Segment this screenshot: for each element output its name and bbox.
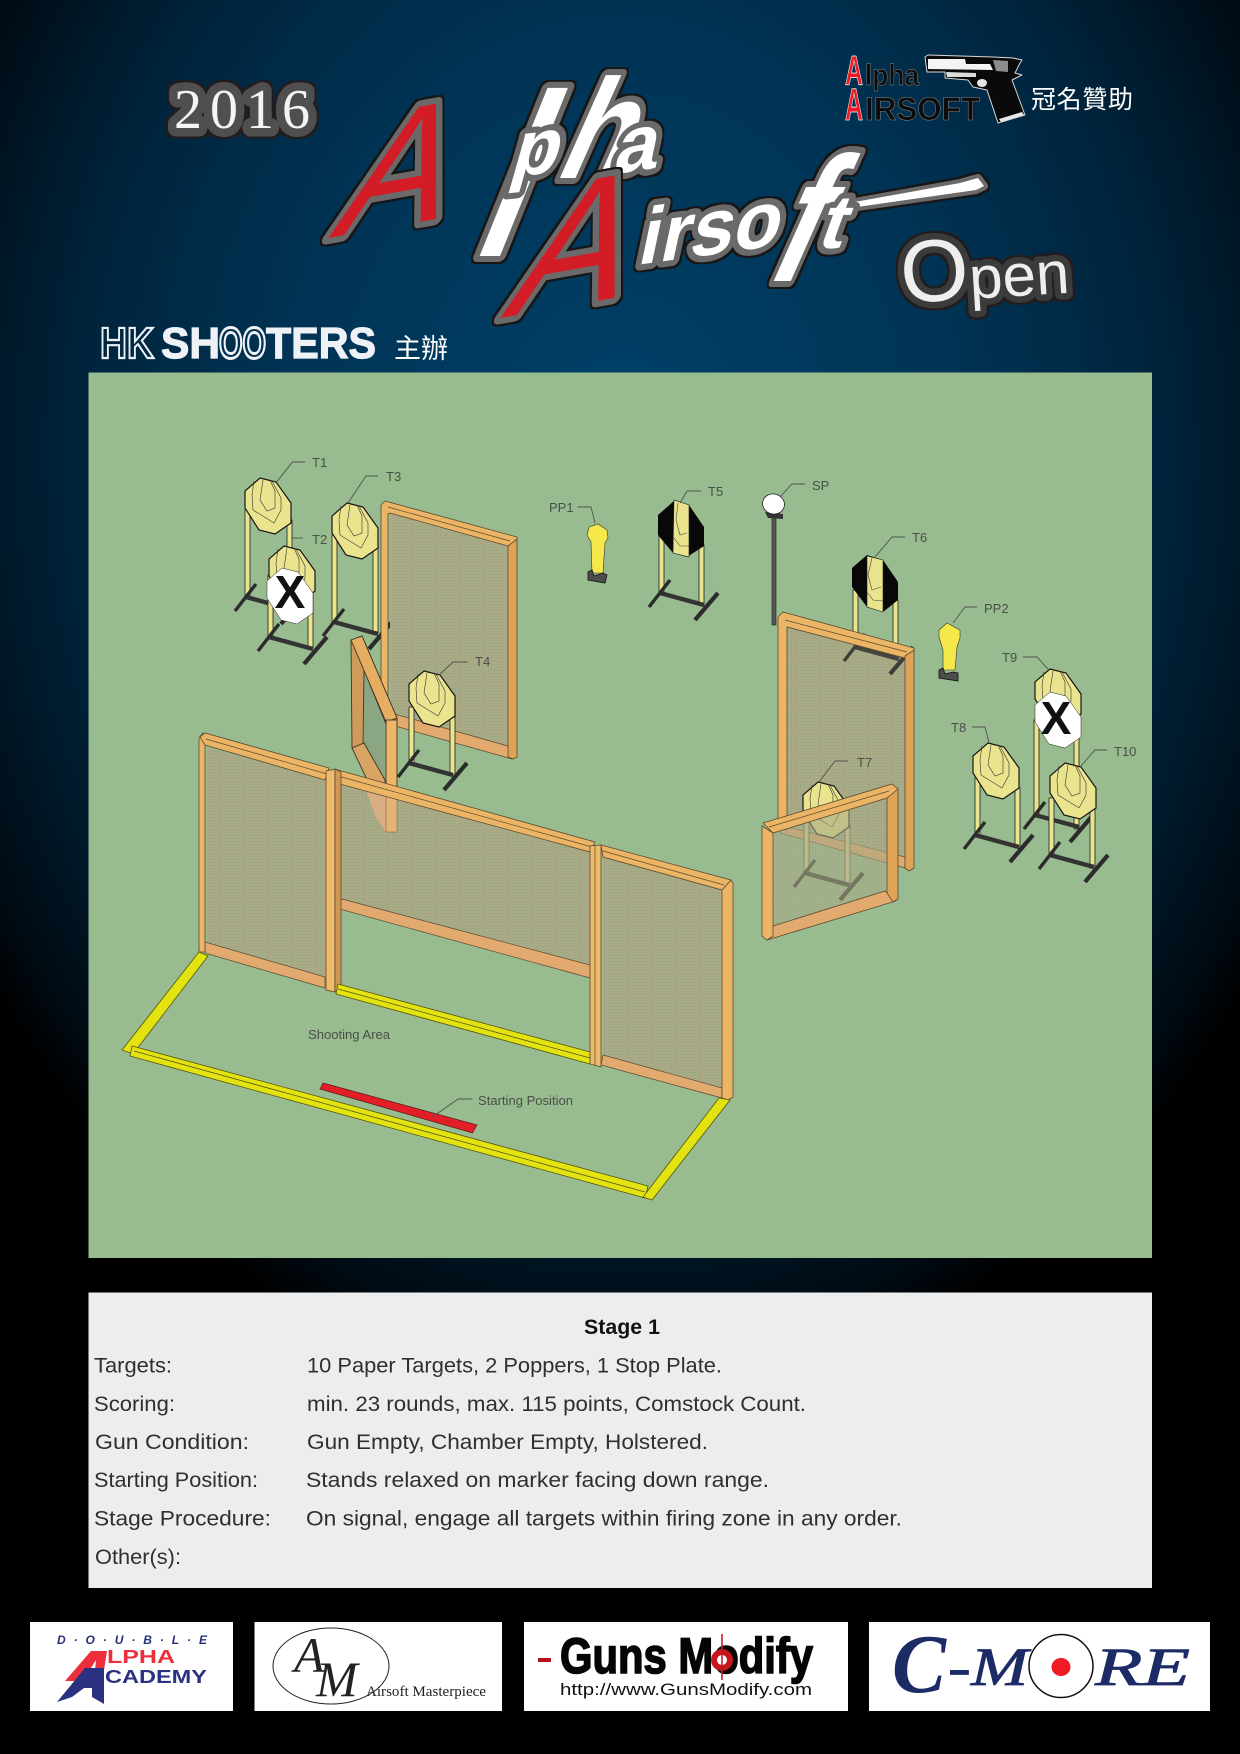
popper PP2 <box>939 623 960 681</box>
leader lines <box>276 462 1107 1117</box>
middle wall panel <box>336 783 590 978</box>
logo: C-MORE: RE <box>1094 1637 1190 1697</box>
row: stage procedure <box>94 1508 902 1530</box>
row: scoring <box>94 1393 806 1416</box>
word: Airsoft: t <box>809 179 865 264</box>
row: targets: 10 Paper Targets, 2 Poppers, 1 Stop Plate. <box>307 1354 722 1378</box>
target T9 with no-shoot <box>1024 669 1093 842</box>
logo: Guns Modify: http://www.GunsModify.com <box>560 1680 812 1699</box>
sponsor wordmark <box>845 47 980 130</box>
logo: Airsoft Masterpiece: Airsoft Masterpiece <box>366 1684 486 1700</box>
target labels <box>308 455 1136 1108</box>
right wall frame <box>778 612 914 871</box>
logo: Open: Open <box>897 213 1071 322</box>
logo: Double Alpha Academy: LPHA <box>107 1647 175 1667</box>
logo: Guns Modify <box>524 1622 848 1711</box>
target labels: T8 <box>951 720 966 735</box>
T6 stand base seen through mesh <box>844 634 913 674</box>
logo: HK Shooters: SH <box>161 319 220 368</box>
target T6 black partial <box>852 555 898 645</box>
row: scoring: min. 23 rounds, max. 115 points, Comstock Count. <box>307 1393 806 1416</box>
target labels: T10 <box>1114 744 1136 759</box>
target T5 black partial <box>649 500 718 620</box>
panel: stage diagram <box>88 372 1152 1258</box>
target labels: T6 <box>912 530 927 545</box>
target labels: Shooting Area <box>308 1027 391 1042</box>
sponsor wordmark: lpha <box>865 59 919 92</box>
target labels: T9 <box>1002 650 1017 665</box>
logo: Airsoft Masterpiece: M <box>315 1651 360 1707</box>
word: Alpha: l <box>444 47 600 306</box>
top rails <box>200 733 329 780</box>
shooting area boundary <box>122 952 730 1200</box>
heading: Stage 1: Stage 1 <box>584 1316 660 1339</box>
word: Airsoft <box>485 120 984 359</box>
starting position marker <box>320 1083 477 1133</box>
logo: C-MORE: -M <box>948 1637 1032 1697</box>
target T10 <box>1039 763 1108 882</box>
target labels: PP1 <box>549 500 574 515</box>
target T2 with no-shoot: X <box>275 566 306 618</box>
logo: Double Alpha Academy <box>30 1622 233 1711</box>
logo: HK Shooters: HK <box>100 319 154 368</box>
word: Alpha <box>314 47 679 306</box>
target labels: T5 <box>708 484 723 499</box>
logo: HK Shooters <box>100 319 376 368</box>
target T9 with no-shoot: X <box>1041 692 1072 744</box>
logo: HK Shooters: TERS <box>266 319 376 368</box>
long front wall <box>199 733 733 1100</box>
target T4 <box>398 671 467 790</box>
sponsor logo: Alpha Airsoft <box>845 47 1025 130</box>
target T2 with no-shoot <box>258 546 327 664</box>
row: scoring: Scoring: <box>94 1393 175 1416</box>
target labels: SP <box>812 478 829 493</box>
sponsor wordmark: IRSOFT <box>865 91 980 127</box>
icon: pistol <box>925 55 1025 123</box>
angled door frame <box>351 636 397 790</box>
stop plate SP <box>760 491 787 625</box>
row: targets <box>94 1354 722 1378</box>
sponsor wordmark: A <box>845 47 863 94</box>
target labels: PP2 <box>984 601 1009 616</box>
left wall panel <box>199 733 325 988</box>
row: gun condition <box>95 1431 708 1454</box>
logo: 2016: 2016 <box>174 79 318 141</box>
target labels: T4 <box>475 654 490 669</box>
logo: HK Shooters: OO <box>219 319 266 368</box>
target labels: T7 <box>857 755 872 770</box>
logo: Airsoft Masterpiece: A <box>291 1627 325 1683</box>
row: starting position <box>94 1469 769 1492</box>
logo: Double Alpha Academy: D·O·U·B·L·E <box>57 1633 208 1647</box>
logo: C-MORE: C <box>892 1618 947 1711</box>
sponsor caption: 冠名贊助 <box>1031 86 1133 114</box>
word: Airsoft: A <box>485 127 677 359</box>
row: starting position: Stands relaxed on marker facing down range. <box>306 1469 769 1492</box>
sponsor wordmark: A <box>845 79 863 130</box>
right wall panel <box>601 857 722 1098</box>
row: starting position: Starting Position: <box>94 1469 258 1492</box>
row: targets: Targets: <box>94 1354 172 1378</box>
row: stage procedure: On signal, engage all targets within firing zone in any order. <box>306 1508 902 1530</box>
word: Airsoft: irso <box>632 173 793 283</box>
logo: Double Alpha Academy: CADEMY <box>105 1667 207 1687</box>
word: Alpha: h <box>539 50 679 208</box>
word: Alpha: A <box>314 57 495 276</box>
target labels: T3 <box>386 469 401 484</box>
row: gun condition: Gun Empty, Chamber Empty, Holstered. <box>307 1431 708 1454</box>
target T8 <box>964 743 1033 862</box>
word: Alpha: a <box>608 95 672 192</box>
popper PP1 <box>587 524 608 583</box>
logo: Alpha Airsoft title <box>314 47 984 359</box>
row: others: Other(s): <box>95 1546 181 1569</box>
panel: stage information <box>88 1292 1152 1588</box>
logo: Guns Modify: Guns Modify <box>560 1628 813 1684</box>
upright posts <box>326 769 335 992</box>
target T1 <box>235 478 304 624</box>
target T3 <box>323 503 392 649</box>
front small frame <box>762 784 898 940</box>
row: gun condition: Gun Condition: <box>95 1431 249 1454</box>
organiser caption: 主辦 <box>394 334 448 364</box>
target labels: T1 <box>312 455 327 470</box>
back wall frame <box>381 501 517 759</box>
target labels: T2 <box>312 532 327 547</box>
row: stage procedure: Stage Procedure: <box>94 1508 271 1530</box>
target labels: Starting Position <box>478 1093 573 1108</box>
word: Airsoft: f <box>745 120 876 319</box>
word: Alpha: p <box>503 100 576 195</box>
logo: Airsoft Masterpiece <box>254 1622 502 1711</box>
target T7 behind front frame <box>794 782 863 900</box>
logo: C-MORE <box>869 1618 1210 1711</box>
